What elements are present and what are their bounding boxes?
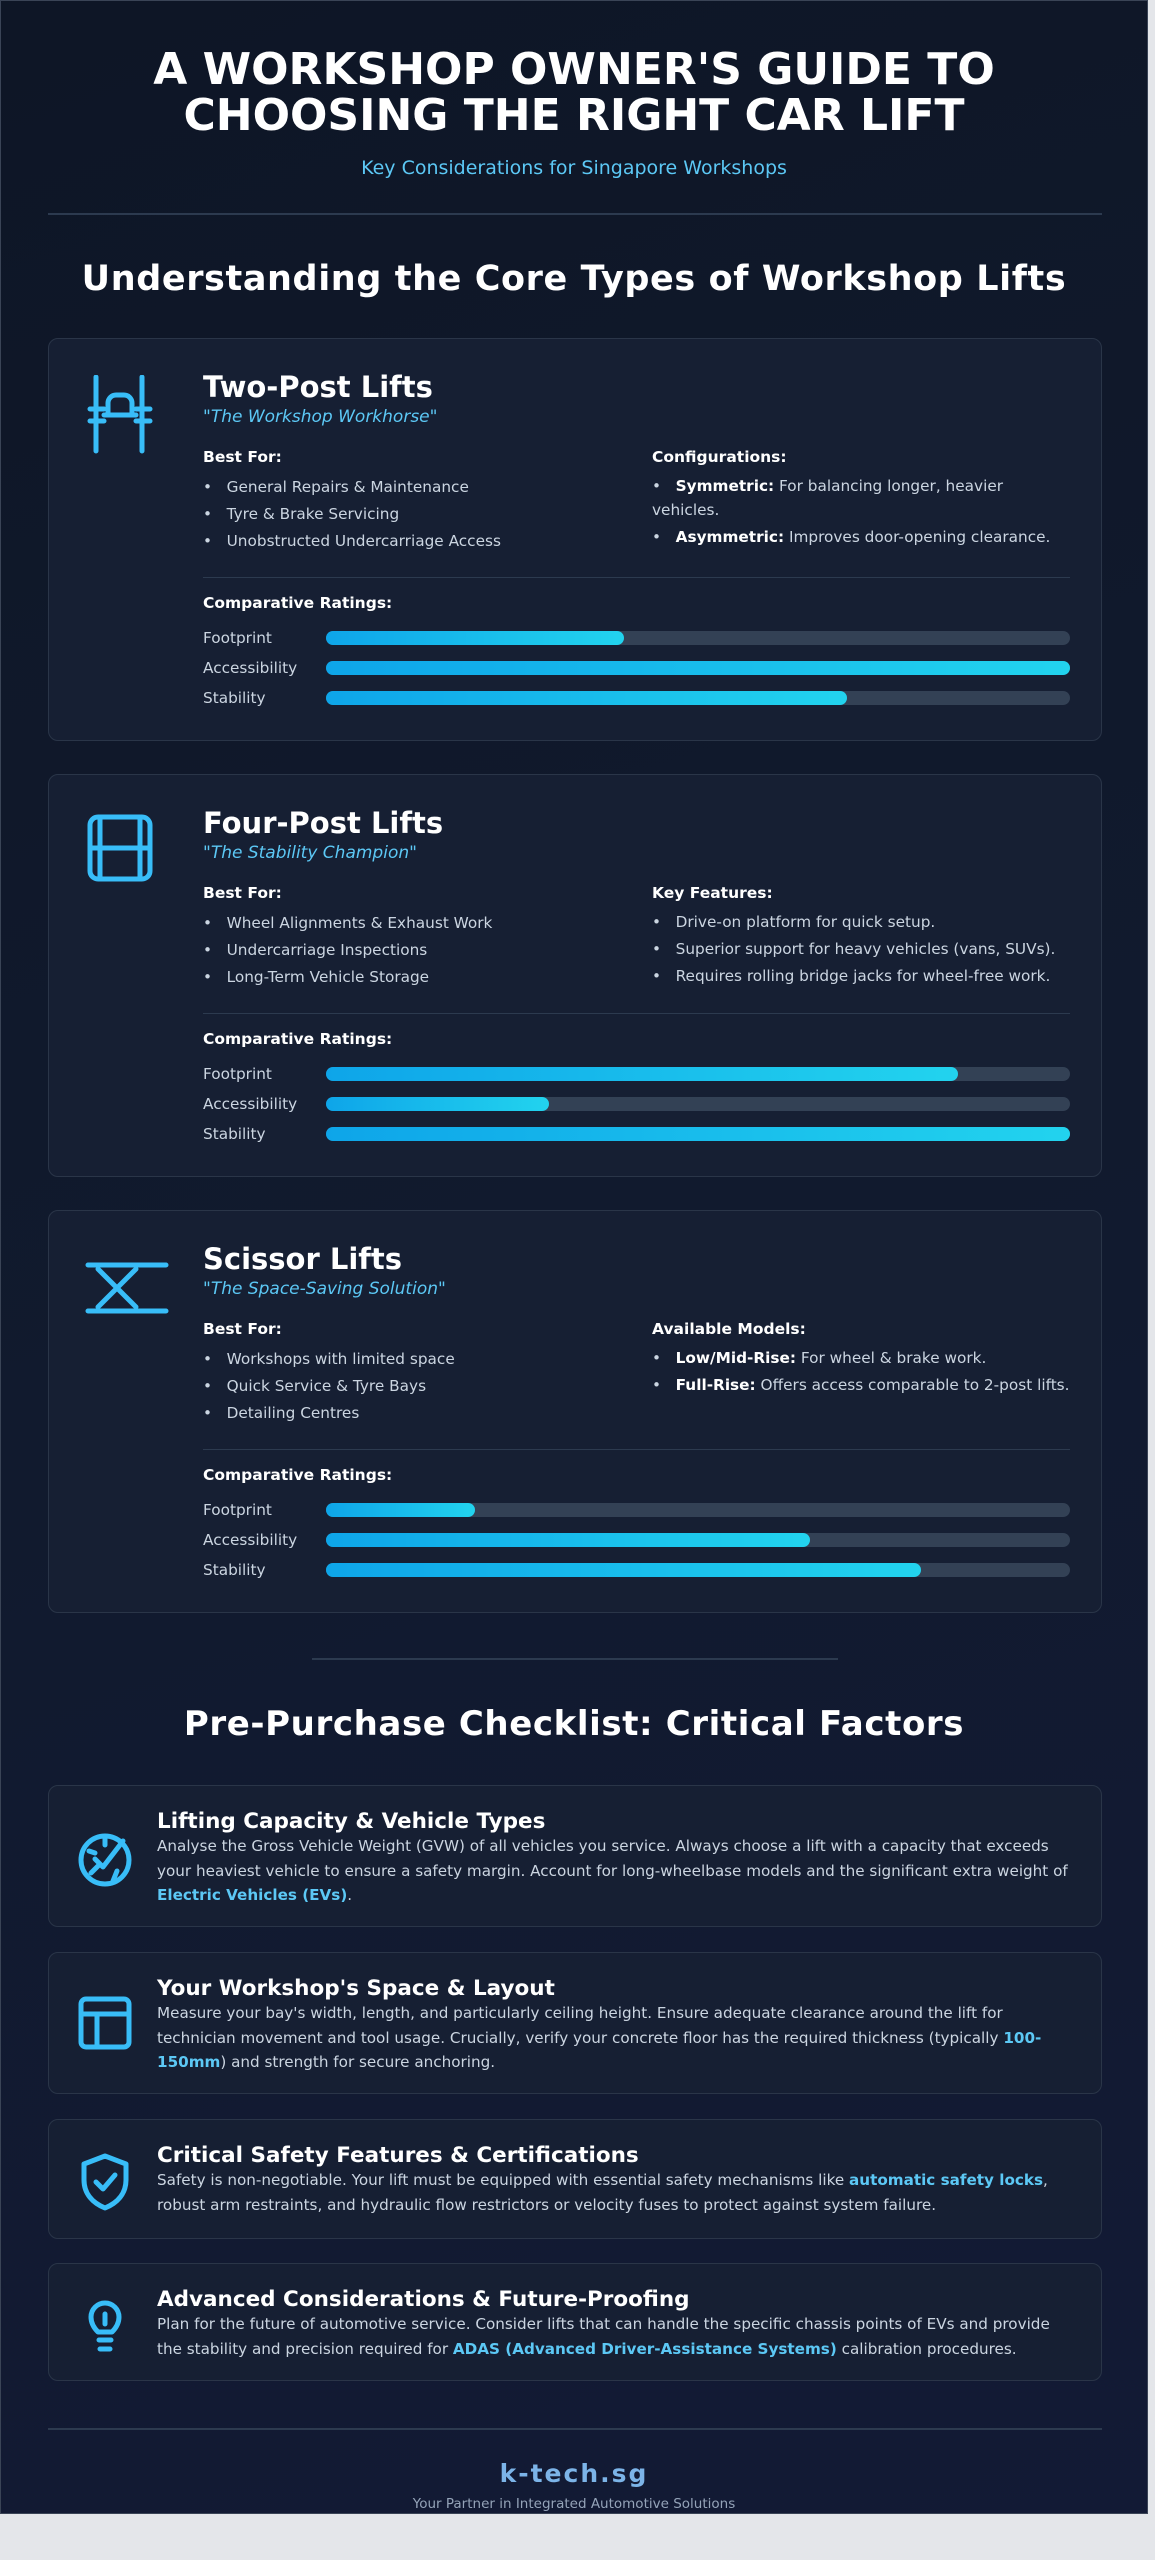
heading: Four-Post Lifts [203,806,443,840]
checklist: safety: Safety is non-negotiable. Your lift must be equipped with essential safety mechanisms like automatic safety locks, robust arm restraints, and hydraulic flow restrictors or velocity fuses to protect against system failure. [157,2171,1048,2214]
title: CHOOSING THE RIGHT CAR LIFT [184,90,964,141]
section heading: core types: Understanding the Core Types of Workshop Lifts [82,259,1066,299]
subtitle: Key Considerations for Singapore Workshops [361,157,787,179]
icon: shield [82,2154,128,2210]
best for list: • Quick Service & Tyre Bays [203,1377,426,1395]
ratings chart: Accessibility [203,1095,297,1113]
checklist: space & layout: Measure your bay's width, length, and particularly ceiling height. Ensure adequate clearance around the lift for technician movement and tool usage. Crucially, verify your concrete floor has the required thickness (typically 100-150mm) and strength for secure anchoring. [157,2004,1041,2071]
best for list [203,884,492,986]
panel: scissor lifts: "The Space-Saving Solution" [203,1279,446,1299]
title [153,44,995,141]
panel: four-post lifts [48,774,1102,1177]
checklist: future-proofing: the stability and precision required for ADAS (Advanced Driver-Assistance Systems) calibration procedures. [157,2340,1017,2358]
available models list: Available Models: [652,1320,806,1338]
best for list: • Wheel Alignments & Exhaust Work [203,914,492,932]
footer: tagline: Your Partner in Integrated Automotive Solutions [413,2496,735,2512]
ratings chart: Footprint [203,629,272,647]
ratings chart: Stability [203,689,266,707]
key features list: • Superior support for heavy vehicles (vans, SUVs). [652,940,1055,958]
panel: two-post lifts [48,338,1102,741]
best for list: • Tyre & Brake Servicing [203,505,399,523]
configurations list: • Symmetric: For balancing longer, heavier vehicles. [652,477,1003,519]
ratings chart: Accessibility [203,659,297,677]
checklist: lifting capacity [48,1785,1102,1927]
available models list [652,1320,1070,1394]
checklist: future-proofing [48,2263,1102,2381]
ratings chart: Accessibility [203,1531,297,1549]
checklist: lifting capacity: Analyse the Gross Vehicle Weight (GVW) of all vehicles you service. Always choose a lift with a capacity that exceeds your heaviest vehicle to ensure a safety margin. Account for long-wheelbase models and the significant extra weight of Electric Vehicles (EVs). [157,1837,1068,1904]
best for list: • Detailing Centres [203,1404,359,1422]
ratings chart: Stability [203,1561,266,1579]
available models list: • Low/Mid-Rise: For wheel & brake work. [652,1349,986,1367]
best for list: • Undercarriage Inspections [203,941,427,959]
configurations list [652,448,1050,546]
configurations list: Configurations: [652,448,787,466]
best for list [203,448,501,550]
heading: Two-Post Lifts [203,370,433,404]
icon: scissor lift [86,1262,168,1314]
best for list: • Long-Term Vehicle Storage [203,968,429,986]
ratings chart: Comparative Ratings: [203,594,392,612]
ratings chart [203,1466,1070,1579]
ratings chart: Footprint [203,1501,272,1519]
checklist: future-proofing: Plan for the future of automotive service. Consider lifts that can handle the specific chassis points of EVs and provide [157,2315,1050,2333]
panel: scissor lifts [48,1210,1102,1613]
best for list: • Unobstructed Undercarriage Access [203,532,501,550]
best for list [203,1320,455,1422]
checklist: space & layout: Your Workshop's Space & Layout [157,1976,555,2001]
key features list [652,884,1055,985]
checklist: space & layout [48,1952,1102,2094]
best for list: Best For: [203,884,282,902]
ratings chart [203,1030,1070,1143]
checklist: safety [48,2119,1102,2239]
best for list: • General Repairs & Maintenance [203,478,469,496]
best for list: • Workshops with limited space [203,1350,455,1368]
footer: brand: k-tech.sg [500,2459,648,2488]
icon: two-post lift [88,375,152,454]
best for list: Best For: [203,448,282,466]
panel: two-post lifts: "The Workshop Workhorse" [203,407,437,427]
key features list: • Requires rolling bridge jacks for wheel-free work. [652,967,1050,985]
key features list: • Drive-on platform for quick setup. [652,913,935,931]
icon: gauge [78,1834,132,1886]
heading: Scissor Lifts [203,1242,402,1276]
ratings chart: Comparative Ratings: [203,1466,392,1484]
key features list: Key Features: [652,884,773,902]
icon: lightbulb [88,2300,122,2352]
checklist: safety: Critical Safety Features & Certifications [157,2143,639,2168]
checklist: lifting capacity: Lifting Capacity & Vehicle Types [157,1809,545,1834]
ratings chart [203,594,1070,707]
icon: layout [78,1996,132,2050]
configurations list: • Asymmetric: Improves door-opening clearance. [652,528,1050,546]
section heading: checklist: Pre-Purchase Checklist: Critical Factors [184,1704,964,1744]
ratings chart: Stability [203,1125,266,1143]
ratings chart: Comparative Ratings: [203,1030,392,1048]
panel: four-post lifts: "The Stability Champion" [203,843,417,863]
icon: four-post lift [88,814,152,882]
title: A WORKSHOP OWNER'S GUIDE TO [153,44,995,95]
available models list: • Full-Rise: Offers access comparable to 2-post lifts. [652,1376,1070,1394]
ratings chart: Footprint [203,1065,272,1083]
checklist: future-proofing: Advanced Considerations & Future-Proofing [157,2287,690,2312]
best for list: Best For: [203,1320,282,1338]
